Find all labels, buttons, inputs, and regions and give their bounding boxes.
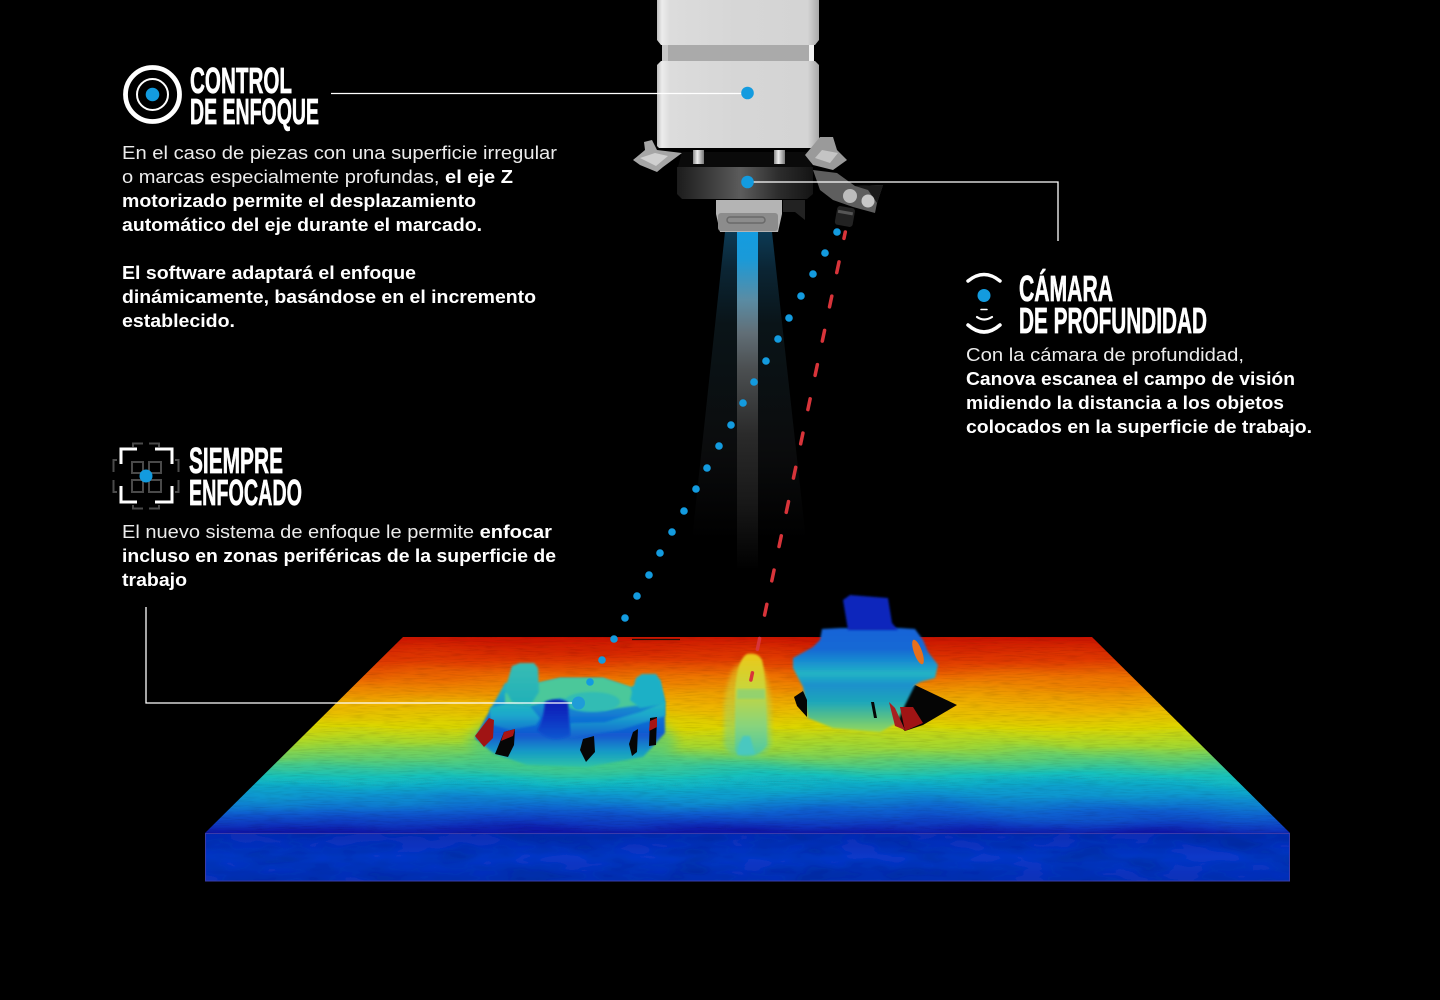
- handle hole: [910, 638, 926, 666]
- blue dotted line: [586, 228, 841, 686]
- heading: siempre enfocado: [189, 440, 302, 513]
- ring top: [505, 678, 640, 710]
- body: [793, 628, 938, 732]
- machine head: [633, 0, 883, 570]
- text: control de enfoque: En el caso de piezas con una superficie irregular: [122, 143, 557, 163]
- focus ring: [677, 167, 813, 199]
- lens block: [716, 200, 805, 232]
- upper housing: [657, 0, 819, 45]
- middle scanned part: [724, 654, 771, 757]
- text: siempre enfocado: [122, 522, 556, 590]
- red dashed laser line: [751, 232, 845, 680]
- surface front face: [205, 833, 1290, 881]
- text: siempre enfocado: incluso en zonas periféricas de la superficie de: [122, 546, 556, 566]
- heading: cámara de profundidad: [1019, 268, 1207, 341]
- heading: siempre enfocado: ENFOCADO: [189, 472, 302, 513]
- heading: control de enfoque: DE ENFOQUE: [190, 91, 319, 132]
- icon: focus target: [126, 68, 180, 122]
- text: cámara de profundidad: Con la cámara de profundidad,: [966, 345, 1244, 365]
- heading: control de enfoque: [190, 60, 319, 132]
- text: control de enfoque: dinámicamente, basándose en el incremento: [122, 287, 536, 307]
- right bracket and depth camera: [805, 137, 883, 227]
- rear towers: [505, 663, 539, 706]
- text: siempre enfocado: trabajo: [122, 570, 187, 590]
- text: cámara de profundidad: Canova escanea el campo de visión: [966, 369, 1295, 389]
- text: control de enfoque: establecido.: [122, 311, 235, 331]
- shadow gaps: [475, 718, 494, 747]
- mounting bolts: [678, 150, 812, 167]
- text: control de enfoque: automático del eje durante el marcado.: [122, 215, 482, 235]
- text: cámara de profundidad: colocados en la superficie de trabajo.: [966, 417, 1312, 437]
- heading: cámara de profundidad: CÁMARA: [1019, 268, 1113, 309]
- surface top with height colour map: [205, 637, 1290, 833]
- scan surface: [205, 637, 1290, 882]
- left bracket: [633, 140, 682, 172]
- heading: siempre enfocado: SIEMPRE: [189, 440, 283, 481]
- text: cámara de profundidad: [966, 345, 1312, 437]
- heading: control de enfoque: CONTROL: [190, 60, 292, 101]
- icon: focus frame: [114, 444, 178, 508]
- shadows: [900, 707, 923, 731]
- beam of light: [692, 232, 806, 570]
- leader: cámara de profundidad: [741, 176, 1058, 241]
- front rim: [490, 704, 540, 730]
- left scanned part: [468, 663, 676, 776]
- text: control de enfoque: o marcas especialmente profundas, el eje Z: [122, 167, 513, 187]
- text: control de enfoque: motorizado permite el desplazamiento: [122, 191, 476, 211]
- heading: cámara de profundidad: DE PROFUNDIDAD: [1019, 300, 1207, 341]
- top block: [843, 595, 898, 630]
- lower housing: [657, 61, 819, 148]
- right scanned part: [793, 595, 957, 732]
- body: [475, 678, 665, 767]
- front tower: [537, 700, 570, 739]
- text: control de enfoque: El software adaptará el enfoque: [122, 263, 416, 283]
- icon: depth waves: [968, 274, 1000, 332]
- text: control de enfoque: [122, 143, 557, 331]
- text: cámara de profundidad: midiendo la distancia a los objetos: [966, 393, 1284, 413]
- leader: control de enfoque: [331, 87, 754, 99]
- text: siempre enfocado: El nuevo sistema de enfoque le permite enfocar: [122, 522, 552, 542]
- leader: siempre enfocado: [146, 607, 585, 710]
